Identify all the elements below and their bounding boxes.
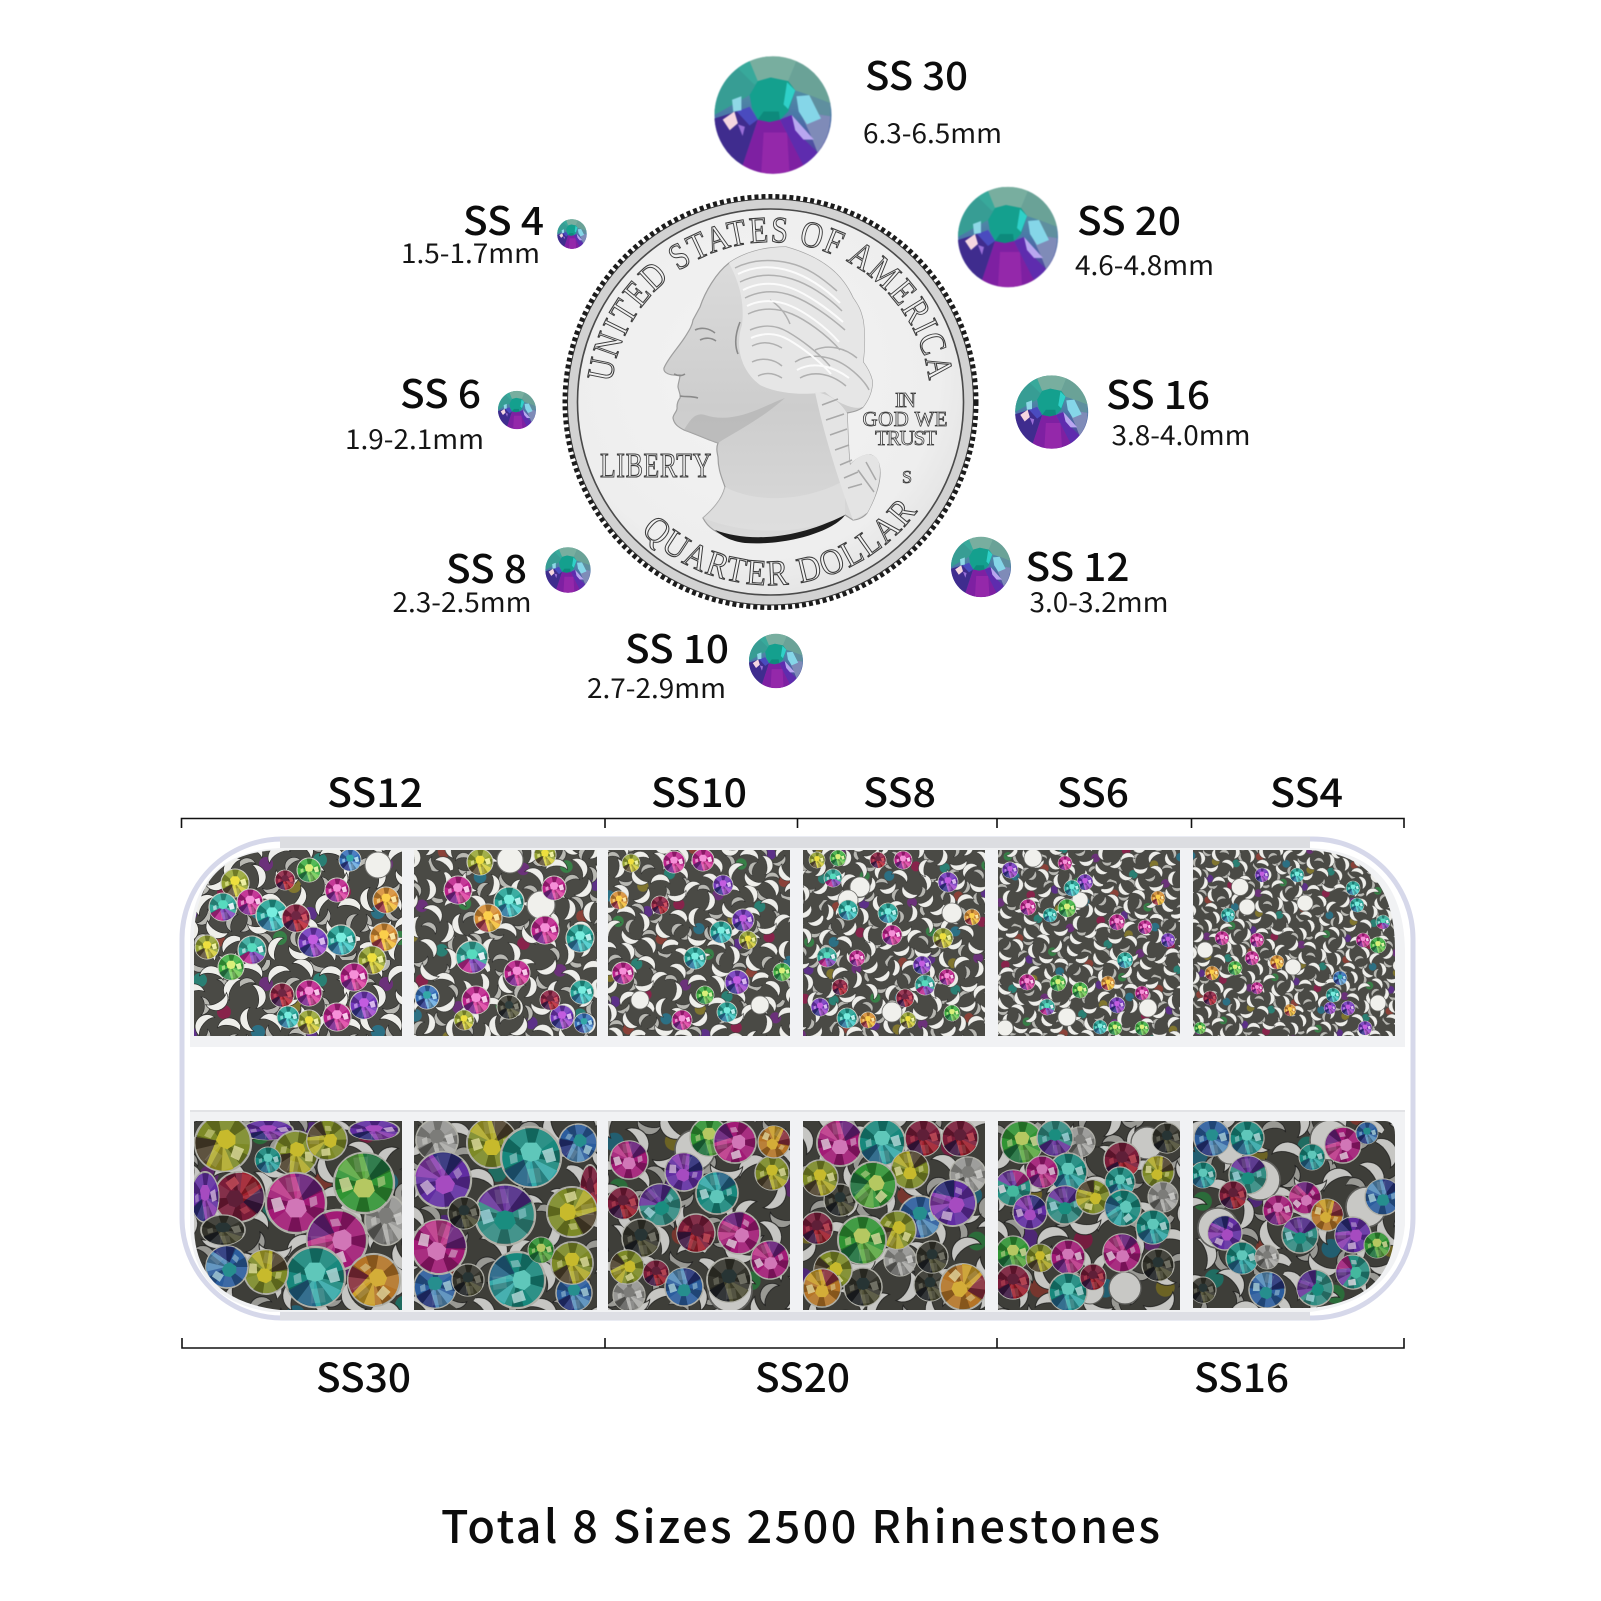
top bracket labels: SS6: [1057, 761, 1129, 819]
rhinestone tray: [182, 837, 1413, 1320]
size label: SS 4: 1.5-1.7mm: [401, 232, 540, 271]
size label: SS 12: 3.0-3.2mm: [1030, 581, 1168, 620]
size label: SS 16: SS 16: [1106, 365, 1210, 421]
coin legend: LIBERTY: LIBERTY: [600, 446, 712, 485]
size label: SS 10: [587, 619, 803, 706]
size label: SS 20: [958, 187, 1214, 287]
queue and bow: [815, 392, 880, 520]
size label: SS 12: [951, 537, 1168, 620]
top bracket labels: SS4: [1270, 761, 1343, 819]
title: Total 8 Sizes 2500 Rhinestones: [441, 1491, 1160, 1556]
Washington portrait: [664, 247, 880, 543]
compartment: SS16 right: [1190, 1120, 1401, 1313]
compartment: SS20 right: [803, 1121, 985, 1310]
coin legend: UNITED STATES OF AMERICA: UNITED STATES OF AMERICA: [587, 217, 952, 381]
coin mint mark: S: [902, 467, 912, 487]
coin motto: IN GOD WE TRUST: GOD WE: [862, 407, 948, 431]
size label: SS 8: [392, 539, 591, 620]
size label: SS 30: SS 30: [865, 46, 968, 102]
facial features: [674, 322, 740, 398]
bottom bracket labels: SS20: [755, 1346, 850, 1404]
compartment: SS4: [1193, 850, 1395, 1036]
top bracket labels: [182, 761, 1404, 828]
compartment: SS12 right: [414, 844, 597, 1036]
compartment: SS12 left: [190, 849, 402, 1036]
size label: SS 8: SS 8: [446, 539, 527, 595]
bottom bracket labels: SS16: [1194, 1346, 1289, 1404]
compartment: SS20 left: [607, 1118, 797, 1312]
size label: SS 30: 6.3-6.5mm: [863, 112, 1002, 151]
compartment: SS6: [997, 849, 1180, 1036]
top bracket labels: SS12: [327, 761, 423, 819]
coin legend: QUARTER DOLLAR: QUARTER DOLLAR: [644, 500, 918, 586]
bottom bracket labels: SS30: [316, 1346, 411, 1404]
size label: SS 6: SS 6: [400, 364, 481, 420]
coin motto: IN GOD WE TRUST: IN: [895, 388, 916, 412]
size label: SS 16: 3.8-4.0mm: [1112, 414, 1250, 453]
top bracket labels: SS8: [863, 761, 936, 819]
portrait shading: [684, 398, 785, 443]
compartment: SS30 right: [414, 1121, 597, 1310]
size label: SS 20: 4.6-4.8mm: [1075, 244, 1214, 283]
compartment: SS16 left: [995, 1120, 1182, 1311]
hair: [729, 247, 872, 408]
compartment: SS10: [608, 849, 791, 1036]
size label: SS 4: SS 4: [463, 191, 544, 247]
top bracket labels: SS10: [651, 761, 747, 819]
size label: SS 20: SS 20: [1077, 191, 1181, 247]
compartment: SS30 left: [194, 1121, 402, 1310]
size label: SS 12: SS 12: [1026, 537, 1130, 593]
size label: SS 16: [1015, 365, 1250, 453]
coin motto: IN GOD WE TRUST: TRUST: [875, 426, 937, 450]
size label: SS 10: 2.7-2.9mm: [587, 667, 726, 706]
size label: SS 10: SS 10: [625, 619, 729, 675]
coin motto: IN GOD WE TRUST: [862, 388, 948, 450]
compartment: SS8: [803, 850, 985, 1036]
bottom bracket labels: [182, 1338, 1404, 1404]
size label: SS 30: [714, 46, 1002, 174]
size label: SS 6: [345, 364, 536, 457]
size label: SS 6: 1.9-2.1mm: [345, 418, 484, 457]
size label: SS 8: 2.3-2.5mm: [392, 581, 532, 620]
quarter dollar coin: [562, 194, 978, 610]
size label: SS 4: [401, 191, 587, 271]
